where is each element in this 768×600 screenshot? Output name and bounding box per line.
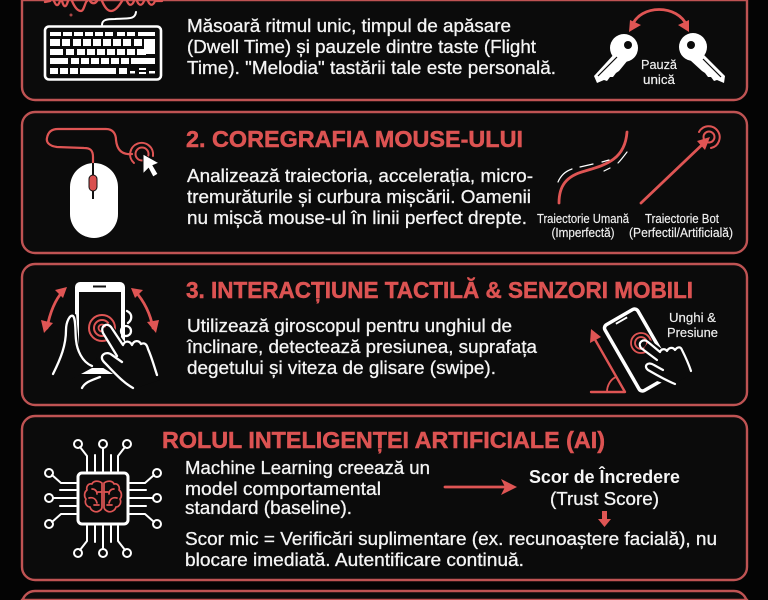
text: mouse description: nu mișcă mouse-ul în linii perfect drepte.	[187, 207, 527, 228]
text: machine learning	[185, 457, 430, 518]
panel: next section, clipped	[22, 591, 747, 600]
panel: keystroke dynamics	[22, 0, 747, 100]
arrow: down from trust score	[598, 511, 611, 527]
label: angle and pressure	[667, 311, 718, 340]
icon: red typing waveform	[45, 1, 162, 16]
text: touch description	[186, 315, 538, 378]
label: unique pause	[641, 58, 677, 87]
labels: trajectories: Traiectorie Umană	[537, 212, 629, 226]
icon: phone with hand and tilt arrows	[41, 282, 160, 388]
heading: mouse choreography: 2. COREGRAFIA MOUSE-ULUI	[186, 126, 523, 152]
icon: two keys with arrow	[594, 10, 725, 83]
text: low score consequence: Scor mic = Verificări suplimentare (ex. recunoaștere facială), nu	[185, 528, 717, 549]
text: keystroke description	[187, 15, 556, 78]
arrow: to trust score	[445, 479, 517, 495]
labels: trajectories: Traiectorie Bot	[645, 212, 719, 226]
label: unique pause: unică	[643, 73, 675, 87]
text: keystroke description: (Dwell Time) și pauzele dintre taste (Flight	[187, 36, 536, 57]
panel: mouse choreography	[22, 112, 747, 253]
text: touch description: înclinare, detectează presiunea, suprafața	[186, 336, 538, 357]
heading: touch and sensors: 3. INTERACȚIUNE TACTILĂ & SENZORI MOBILI	[186, 276, 693, 303]
text: trust score	[529, 466, 680, 509]
text: low score consequence: blocare imediată. Autentificare continuă.	[185, 549, 524, 570]
text: machine learning: Machine Learning creează un	[185, 457, 430, 478]
chart: human trajectory	[558, 132, 627, 203]
text: mouse description: Analizează traiectoria, accelerația, micro-	[187, 165, 533, 186]
icon: tilted phone with angle	[590, 308, 694, 392]
chart: bot trajectory	[641, 126, 720, 203]
icon: AI chip with brain	[45, 440, 161, 557]
heading: role of AI: ROLUL INTELIGENȚEI ARTIFICIALE (AI)	[162, 427, 605, 453]
label: angle and pressure: Unghi &	[669, 311, 717, 325]
icon: mouse with cable and cursor	[47, 129, 159, 238]
text: machine learning: standard (baseline).	[185, 497, 352, 518]
labels: trajectories: (Perfectil/Artificială)	[629, 226, 733, 240]
label: unique pause: Pauză	[641, 58, 677, 72]
text: trust score: (Trust Score)	[550, 488, 659, 509]
labels: trajectories	[537, 212, 733, 240]
text: mouse description: tremurăturile și curbura mișcării. Oamenii	[187, 186, 531, 207]
text: touch description: degetului și viteza de glisare (swipe).	[187, 357, 496, 378]
text: low score consequence	[185, 528, 717, 570]
text: keystroke description: Măsoară ritmul unic, timpul de apăsare	[187, 15, 511, 36]
icon: keyboard	[45, 12, 161, 80]
labels: trajectories: (Imperfectă)	[552, 226, 614, 240]
text: machine learning: model comportamental	[185, 478, 381, 499]
text: mouse description	[187, 165, 533, 228]
panel: touch and mobile sensors	[22, 264, 747, 405]
panel: role of AI	[22, 416, 747, 580]
text: trust score: Scor de Încredere	[529, 466, 680, 487]
text: keystroke description: Time). "Melodia" tastării tale este personală.	[187, 57, 556, 78]
label: angle and pressure: Presiune	[667, 326, 718, 340]
text: touch description: Utilizează giroscopul pentru unghiul de	[187, 315, 512, 336]
